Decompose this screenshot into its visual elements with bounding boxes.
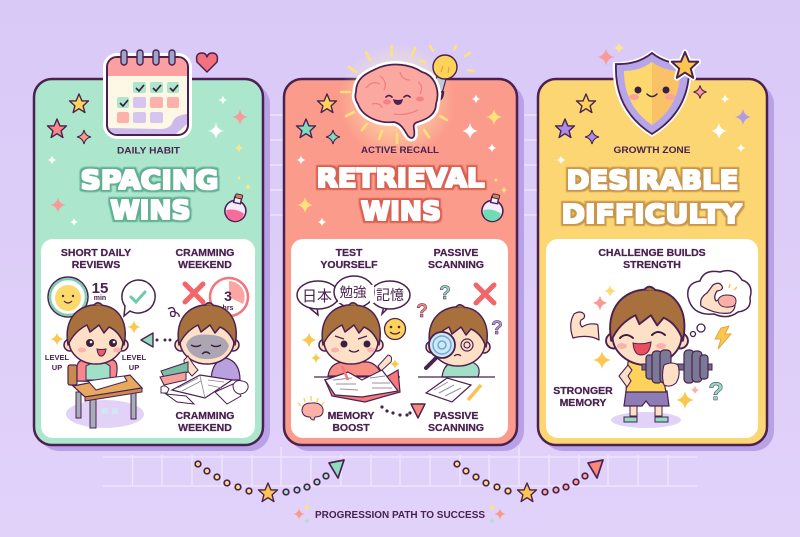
icon: shield star <box>672 52 698 78</box>
speech bubbles: 日本 <box>302 288 332 305</box>
label: test yourself: TEST <box>336 247 363 259</box>
background grid <box>103 115 697 486</box>
tired child <box>160 303 248 404</box>
brain glow <box>339 42 455 158</box>
inner white card <box>41 239 255 438</box>
icon: light bulb <box>420 46 474 101</box>
label: passive scanning top: SCANNING <box>428 259 484 271</box>
title: SPACING <box>80 166 218 196</box>
panel: desirable difficulty <box>538 42 774 451</box>
title <box>80 166 218 226</box>
icon: smiley <box>384 318 406 340</box>
label: level up right: LEVEL <box>122 353 147 362</box>
label: memory boost: BOOST <box>332 422 370 434</box>
label: challenge builds strength: STRENGTH <box>623 259 681 271</box>
child with dumbbell <box>606 287 712 428</box>
icon: red cross <box>476 285 494 303</box>
label: cramming weekend top: CRAMMING <box>176 247 234 259</box>
title <box>316 164 484 227</box>
decorative stars <box>48 94 252 226</box>
sun rays <box>341 46 447 143</box>
sparkles yellow <box>302 332 400 369</box>
label: stronger memory: STRONGER <box>553 385 613 397</box>
icon: three hours clock: hrs <box>223 305 234 312</box>
panel card <box>34 79 263 445</box>
title: RETRIEVAL <box>316 164 484 194</box>
text: 15 min: 15 <box>92 280 108 297</box>
icon: check bubble <box>122 280 155 316</box>
progression path right <box>454 460 603 502</box>
panel shadow <box>543 84 774 451</box>
title: WINS <box>110 196 190 226</box>
label: level up left: LEVEL <box>45 353 70 362</box>
speech bubbles: 記憶 <box>376 287 404 303</box>
panel card <box>538 79 767 445</box>
title: WINS <box>361 197 441 227</box>
thought cloud <box>688 271 751 336</box>
question marks <box>416 283 503 339</box>
label: passive scanning bottom: PASSIVE <box>434 410 478 422</box>
icon: memory brain <box>298 396 324 420</box>
label: cramming weekend bottom: WEEKEND <box>178 422 232 434</box>
question mark: ? <box>708 378 724 406</box>
arrow: passive to memory <box>380 404 425 418</box>
panel shadow <box>39 84 270 451</box>
label: test yourself: YOURSELF <box>320 259 378 271</box>
question marks: ? <box>416 301 428 322</box>
sparkles yellow <box>50 320 140 346</box>
label: passive scanning top: PASSIVE <box>434 247 478 259</box>
panel card <box>284 79 517 445</box>
label: memory boost: MEMORY <box>328 410 374 422</box>
child with magnifier <box>418 305 495 402</box>
label: passive scanning bottom: SCANNING <box>428 422 484 434</box>
panel: spacing wins <box>34 50 270 451</box>
arrow: back to spacing <box>141 333 172 347</box>
label: challenge builds strength: CHALLENGE BUILDS <box>598 247 706 259</box>
panel shadow <box>289 84 524 451</box>
caption sparkles <box>294 504 506 524</box>
title: DIFFICULTY <box>562 200 743 230</box>
speech bubbles <box>297 276 410 315</box>
icon: three hours clock <box>210 278 248 316</box>
subtitle: DAILY HABIT <box>117 146 180 156</box>
decorative stars <box>296 94 508 226</box>
icon: smiling clock <box>48 277 88 317</box>
icon: potion <box>223 192 249 223</box>
label: short daily reviews: REVIEWS <box>72 259 120 271</box>
icon: calendar <box>103 50 192 139</box>
subtitle: ACTIVE RECALL <box>361 145 439 156</box>
icon: potion <box>480 192 506 223</box>
text: 15 min: min <box>94 295 106 302</box>
child writing <box>314 303 400 402</box>
progression path left <box>195 460 344 502</box>
icon: shield <box>613 50 692 137</box>
child at desk <box>64 303 144 428</box>
inner white card <box>291 239 508 438</box>
question marks: ? <box>491 318 503 339</box>
label: level up right: UP <box>129 363 139 372</box>
label: cramming weekend bottom: CRAMMING <box>176 410 234 422</box>
title <box>562 166 743 230</box>
subtitle: GROWTH ZONE <box>614 145 690 156</box>
icon: lightning <box>715 326 731 349</box>
caption: PROGRESSION PATH TO SUCCESS <box>315 509 485 521</box>
icon: heart <box>197 53 217 72</box>
panel: retrieval wins <box>284 42 524 451</box>
icon: flexed arm <box>571 312 599 340</box>
label: cramming weekend top: WEEKEND <box>178 259 232 271</box>
inner white card <box>546 239 758 438</box>
icon: cross mark <box>185 284 203 302</box>
icon: brain <box>355 65 437 138</box>
label: short daily reviews: SHORT DAILY <box>61 247 131 259</box>
decorative stars <box>556 42 751 164</box>
speech bubbles: 勉強 <box>340 285 367 300</box>
label: level up left: UP <box>52 363 62 372</box>
icon: three hours clock: 3 <box>224 288 232 304</box>
title: DESIRABLE <box>566 166 738 196</box>
question marks: ? <box>439 283 451 304</box>
label: stronger memory: MEMORY <box>560 397 606 409</box>
sparkles <box>592 285 700 409</box>
